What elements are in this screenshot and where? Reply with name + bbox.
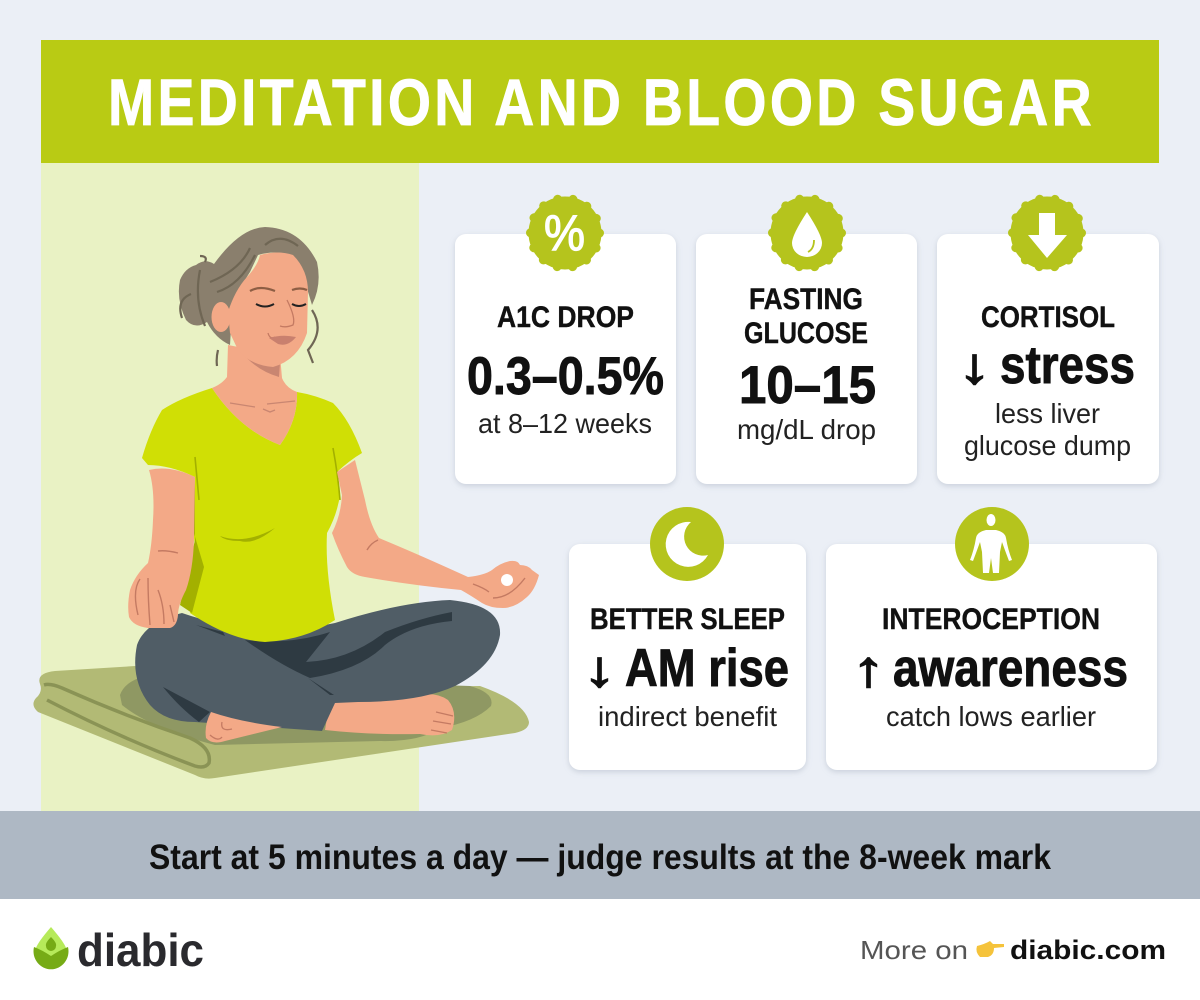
yoga mat (33, 666, 529, 779)
value: ↑ (852, 641, 885, 697)
note: at 8–12 weeks (478, 408, 652, 439)
label: CORTISOL (981, 301, 1115, 334)
value: awareness (893, 639, 1128, 698)
note: indirect benefit (598, 701, 777, 732)
left foot and toes (206, 712, 453, 742)
more on link: diabic.com (1010, 935, 1166, 965)
value: ↓ (583, 641, 616, 697)
icon: body badge (955, 507, 1029, 581)
label: A1C DROP (497, 301, 634, 334)
value (958, 336, 1135, 395)
icon: drop badge (770, 196, 844, 270)
icon: down arrow badge (1010, 196, 1084, 270)
more on link (860, 935, 1166, 965)
hair and bun (179, 227, 319, 366)
face (212, 252, 308, 367)
note: mg/dL drop (737, 414, 876, 445)
label: INTEROCEPTION (882, 603, 1100, 636)
footer (0, 899, 1200, 1000)
illustration: woman meditating on a mat (33, 227, 539, 779)
panel: illustration background (41, 163, 419, 811)
label: FASTING (749, 283, 863, 316)
takeaway text: Start at 5 minutes a day — judge results at the 8-week mark (149, 838, 1051, 877)
legs (135, 600, 500, 731)
icon: pointing hand (976, 941, 1004, 957)
right foot (325, 694, 454, 735)
value: 0.3–0.5% (467, 347, 664, 406)
value: stress (1000, 336, 1135, 395)
label: BETTER SLEEP (590, 603, 785, 636)
shirt shading (180, 448, 340, 613)
title banner (41, 40, 1159, 163)
icon: percent badge (528, 196, 602, 270)
icon: moon badge (650, 507, 724, 581)
neck shadow and collarbone (230, 350, 295, 412)
value: AM rise (625, 639, 789, 698)
card: cortisol (937, 196, 1159, 484)
label: GLUCOSE (744, 317, 868, 350)
note: glucose dump (964, 430, 1131, 461)
icon: percent badge: % (544, 205, 585, 261)
value: 10–15 (739, 356, 876, 415)
icon: diabic drop (34, 927, 68, 969)
more on link: More on (860, 935, 968, 965)
card: fasting glucose (696, 196, 917, 484)
value: ↓ (958, 338, 991, 394)
bottom band (0, 811, 1200, 899)
card: A1C drop (455, 196, 676, 484)
card: interoception (826, 507, 1157, 770)
label (744, 283, 868, 350)
logo (34, 924, 204, 976)
title: MEDITATION AND BLOOD SUGAR (108, 65, 1092, 139)
card: better sleep (569, 507, 806, 770)
arms and hands (128, 460, 539, 628)
neck and chest (212, 345, 297, 445)
note (964, 398, 1131, 461)
note: catch lows earlier (886, 701, 1096, 732)
shirt (142, 388, 362, 642)
note: less liver (995, 398, 1100, 429)
wordmark: diabic (77, 924, 204, 976)
